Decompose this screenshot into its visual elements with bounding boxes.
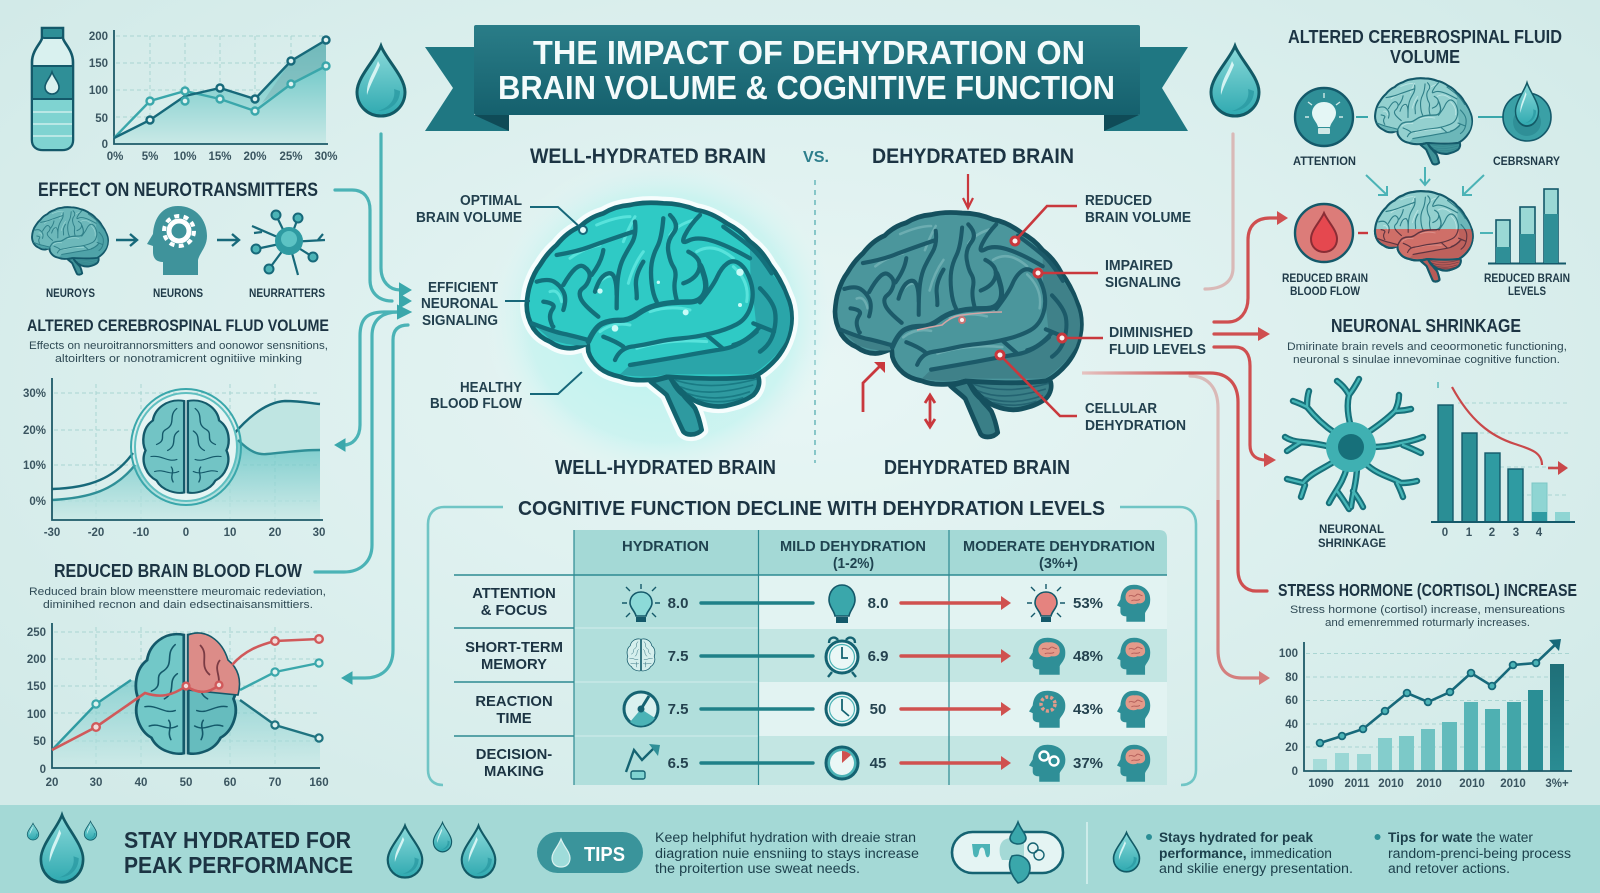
footer headline <box>124 827 353 878</box>
heading: altered cerebrospinal fluid volume <box>1288 27 1562 67</box>
table heading: COGNITIVE FUNCTION DECLINE WITH DEHYDRATION LEVELS <box>518 498 1105 520</box>
column headers: HYDRATION <box>622 538 709 555</box>
bullet: tips for water <box>1374 830 1571 876</box>
neurotransmitter icon flow: NEURRATTERS <box>249 286 325 300</box>
column headers: (1-2%) <box>833 555 874 572</box>
text block: shrinkage description: Dmirinate brain revels and ceoormonetic functioning, <box>1287 341 1567 353</box>
diagram: fluid and attention: BLOOD FLOW <box>1290 284 1361 298</box>
chart: blood flow lines with brain: 40 <box>135 777 147 789</box>
chart: shrinkage bars: 4 <box>1536 527 1543 539</box>
tips text <box>655 830 919 876</box>
labels: well-hydrated brain callouts: EFFICIENT <box>428 280 498 296</box>
labels: well-hydrated brain callouts: HEALTHY <box>460 380 522 396</box>
row labels <box>465 586 563 780</box>
panel: cognitive function table <box>428 498 1196 785</box>
chart: cerebrospinal fluid curve with brain: 0% <box>29 496 46 508</box>
row labels: DECISION- <box>476 747 552 763</box>
text block: cerebrospinal description: Effects on neuroitrannorsmitters and oonowor sensnitions, <box>29 340 328 352</box>
icon: drop circle <box>1503 83 1551 141</box>
icons: three drops <box>388 822 495 878</box>
chart: cortisol bars and line: 100 <box>1279 648 1298 660</box>
arrows: shrinkage indicators <box>863 174 973 427</box>
chart: cortisol bars and line: 80 <box>1285 672 1298 684</box>
diagram: fluid and attention <box>1282 78 1570 298</box>
icon: capsule <box>952 822 1063 883</box>
icon: footer drop <box>1114 833 1139 872</box>
row: attention and focus: 8.0 <box>868 595 888 612</box>
bullet: stays hydrated: performance, immedication <box>1159 846 1332 861</box>
chart: dehydration percentage line chart: 5% <box>142 151 158 163</box>
arrow <box>116 234 137 246</box>
caption: neuronal shrinkage: NEURONAL <box>1319 522 1384 536</box>
labels: dehydrated brain callouts: BRAIN VOLUME <box>1085 210 1191 226</box>
heading: effect on neurotransmitters: EFFECT ON NEUROTRANSMITTERS <box>38 179 318 201</box>
heading: altered cerebrospinal fluid volume: VOLUME <box>1390 47 1460 67</box>
banner tail right <box>1104 47 1188 131</box>
chart: blood flow lines with brain: 50 <box>180 777 192 789</box>
chart: blood flow lines with brain: 20 <box>46 777 58 789</box>
text block: stress description <box>1290 604 1566 629</box>
chart: dehydration percentage line chart: 25% <box>279 151 303 163</box>
labels: well-hydrated brain callouts: NEURONAL <box>421 296 498 312</box>
chart: cerebrospinal fluid curve with brain <box>23 378 325 539</box>
banner tail left <box>425 47 509 131</box>
tips pill <box>537 832 643 873</box>
arrow <box>217 234 239 246</box>
chart: cerebrospinal fluid curve with brain: 20 <box>269 527 281 539</box>
row: reaction time <box>624 691 1150 728</box>
tips pill: TIPS <box>584 844 625 866</box>
chart: cortisol bars and line: 2011 <box>1345 778 1370 790</box>
heading: dehydrated: DEHYDRATED BRAIN <box>872 145 1074 168</box>
row: attention and focus <box>622 584 1150 623</box>
illustration: neuron <box>1285 379 1423 509</box>
icon: neuron <box>252 210 325 275</box>
column headers: (3%+) <box>1039 555 1078 572</box>
tips text: the proitertion use sweat needs. <box>655 861 860 876</box>
row labels: REACTION <box>475 694 553 710</box>
row: reaction time: 43% <box>1073 701 1103 718</box>
column headers <box>622 538 1155 572</box>
heading: neuronal shrinkage: NEURONAL SHRINKAGE <box>1331 316 1521 336</box>
panel: footer <box>27 815 1571 884</box>
chart: blood flow lines with brain: 30 <box>90 777 102 789</box>
chart: cortisol bars and line: 2010 <box>1378 778 1404 790</box>
table frame <box>428 507 1196 785</box>
chart: dehydration percentage line chart: 150 <box>89 58 108 70</box>
footer band background <box>0 805 1600 893</box>
icon: blood drop circle <box>1295 204 1353 262</box>
labels: dehydrated brain callouts: IMPAIRED <box>1105 258 1173 274</box>
row: short-term memory: 6.9 <box>868 648 888 665</box>
row labels: TIME <box>496 711 532 727</box>
tips text: Keep helphifut hydration with dreaie stran <box>655 830 916 845</box>
bullet: stays hydrated <box>1146 830 1353 876</box>
row labels: MEMORY <box>481 657 547 673</box>
labels: dehydrated brain callouts: DIMINISHED <box>1109 325 1193 341</box>
icon: partly red brain <box>1375 191 1473 281</box>
chart: cortisol bars and line: 1090 <box>1308 778 1334 790</box>
labels: dehydrated brain callouts: REDUCED <box>1085 193 1152 209</box>
row: decision-making <box>626 744 1150 782</box>
chart: cortisol bars and line: 0 <box>1292 766 1298 778</box>
labels: dehydrated brain callouts: FLUID LEVELS <box>1109 342 1206 358</box>
chart: blood flow lines with brain: 70 <box>269 777 281 789</box>
title text: BRAIN VOLUME & COGNITIVE FUNCTION <box>498 69 1115 106</box>
chart: dehydration percentage line chart: 200 <box>89 31 108 43</box>
chart: blood flow lines with brain: 50 <box>33 736 46 748</box>
bullet: stays hydrated: and skilie energy presentation. <box>1159 861 1353 876</box>
row: short-term memory: 48% <box>1073 648 1103 665</box>
row: decision-making: 6.5 <box>668 755 688 772</box>
icon: water bottle <box>32 28 73 150</box>
chart: blood flow lines with brain: 200 <box>27 654 46 666</box>
chart: blood flow lines with brain: 60 <box>224 777 236 789</box>
labels: dehydrated brain callouts: CELLULAR <box>1085 401 1157 417</box>
row: attention and focus: 8.0 <box>668 595 688 612</box>
chart: cerebrospinal fluid curve with brain: -30 <box>44 527 60 539</box>
diagram: fluid and attention: CEBRSNARY <box>1493 154 1560 168</box>
panel: left column <box>23 28 338 789</box>
row: reaction time: 50 <box>870 701 886 718</box>
row labels: ATTENTION <box>472 586 556 602</box>
chart: cortisol bars and line: 20 <box>1285 742 1298 754</box>
bullet: tips for water: Tips for wate the water <box>1388 830 1534 845</box>
diagram: fluid and attention: LEVELS <box>1508 284 1546 298</box>
column headers: MODERATE DEHYDRATION <box>963 538 1155 555</box>
chart: dehydration percentage line chart: 15% <box>208 151 232 163</box>
text block: shrinkage description <box>1287 341 1567 366</box>
chart: cortisol bars and line: 2010 <box>1500 778 1526 790</box>
labels: well-hydrated brain callouts <box>416 193 587 412</box>
chart: shrinkage bars: 0 <box>1442 527 1448 539</box>
chart: blood flow lines with brain: 250 <box>27 627 46 639</box>
heading: well-hydrated: WELL-HYDRATED BRAIN <box>530 145 766 168</box>
chart: blood flow lines with brain: 160 <box>309 777 329 789</box>
labels: well-hydrated brain callouts: BLOOD FLOW <box>430 396 522 412</box>
chart: blood flow lines with brain: 0 <box>40 764 46 776</box>
chart: cerebrospinal fluid curve with brain: -10 <box>133 527 149 539</box>
bullet: tips for water: random-prenci-being process <box>1388 846 1571 861</box>
row: short-term memory: 7.5 <box>668 648 688 665</box>
chart: cortisol bars and line: 40 <box>1285 719 1298 731</box>
labels: dehydrated brain callouts: DEHYDRATION <box>1085 418 1186 434</box>
labels: well-hydrated brain callouts: SIGNALING <box>422 313 498 329</box>
row: decision-making: 45 <box>870 755 886 772</box>
diagram: fluid and attention: REDUCED BRAIN <box>1282 271 1368 285</box>
heading: reduced brain blood flow: REDUCED BRAIN BLOOD FLOW <box>54 561 302 581</box>
row: short-term memory <box>627 638 1150 677</box>
caption: well-hydrated: WELL-HYDRATED BRAIN <box>555 457 776 479</box>
chart: dehydration percentage line chart: 10% <box>173 151 197 163</box>
row: decision-making: 37% <box>1073 755 1103 772</box>
labels: dehydrated brain callouts <box>917 193 1206 434</box>
text block: blood flow description: diminihed recnon and dain edsectinaisansmittiers. <box>43 599 313 611</box>
text block: stress description: Stress hormone (cortisol) increase, mensureations <box>1290 604 1566 616</box>
icons: drops left <box>27 815 97 882</box>
text block: stress description: and emenremmed roturmarly increases. <box>1325 617 1530 629</box>
chart: cortisol bars and line: 2010 <box>1459 778 1485 790</box>
chart: dehydration percentage line chart: 30% <box>314 151 338 163</box>
chart: cerebrospinal fluid curve with brain: 0 <box>183 527 189 539</box>
chart: dehydration percentage line chart: 0% <box>107 151 123 163</box>
text block: blood flow description <box>29 586 326 611</box>
row labels: & FOCUS <box>481 603 547 619</box>
bullet: tips for water: and retover actions. <box>1388 861 1510 876</box>
caption: neuronal shrinkage <box>1318 522 1386 550</box>
neurotransmitter icon flow: NEURONS <box>153 286 203 300</box>
caption: neuronal shrinkage: SHRINKAGE <box>1318 536 1386 550</box>
title banner <box>425 25 1188 131</box>
chart: cerebrospinal fluid curve with brain: -20 <box>88 527 104 539</box>
icon: head with gear <box>147 206 207 275</box>
label: versus: VS. <box>803 149 829 166</box>
labels: dehydrated brain callouts: SIGNALING <box>1105 275 1181 291</box>
neurotransmitter icon flow <box>32 206 325 300</box>
column headers: MILD DEHYDRATION <box>780 538 926 555</box>
chart: blood flow lines with brain <box>27 623 329 789</box>
chart: cortisol bars and line: 3%+ <box>1545 778 1569 790</box>
chart: dehydration percentage line chart: 0 <box>102 139 108 151</box>
row labels: MAKING <box>484 764 544 780</box>
illustration: dehydrated brain <box>835 212 1081 437</box>
labels: well-hydrated brain callouts: OPTIMAL <box>460 193 522 209</box>
chart: cortisol bars and line: 2010 <box>1416 778 1442 790</box>
chart: cortisol bars and line <box>1279 639 1572 790</box>
chart: shrinkage bars: 1 <box>1466 527 1473 539</box>
brain glow <box>484 153 840 483</box>
chart: cerebrospinal fluid curve with brain: 20% <box>23 425 46 437</box>
icon: brain <box>32 207 108 275</box>
heading: altered cerebrospinal fluid volume: ALTERED CEREBROSPINAL FLUID <box>1288 27 1562 47</box>
chart: blood flow lines with brain: 150 <box>27 681 46 693</box>
chart: cerebrospinal fluid curve with brain: 10 <box>224 527 236 539</box>
footer headline: STAY HYDRATED FOR <box>124 827 351 853</box>
footer headline: PEAK PERFORMANCE <box>124 852 353 878</box>
diagram: fluid and attention: REDUCED BRAIN <box>1484 271 1570 285</box>
row: reaction time: 7.5 <box>668 701 688 718</box>
icon: left water drop <box>357 46 405 116</box>
chart: blood flow lines with brain: 100 <box>27 709 46 721</box>
text block: blood flow description: Reduced brain blow meensttere meuromaic redeviation, <box>29 586 326 598</box>
chart: dehydration percentage line chart: 100 <box>89 85 108 97</box>
text block: cerebrospinal description <box>29 340 328 365</box>
illustration: well-hydrated brain <box>527 203 792 434</box>
chart: shrinkage bars: 2 <box>1489 527 1495 539</box>
caption: dehydrated: DEHYDRATED BRAIN <box>884 457 1070 479</box>
icon: right water drop <box>1211 46 1259 116</box>
text block: shrinkage description: neuronal s sinulae innevominae cognitive function. <box>1293 354 1560 366</box>
chart: cerebrospinal fluid curve with brain: 30% <box>23 388 46 400</box>
tips text: diagration nuie ensniing to stays increase <box>655 846 919 861</box>
icon: bulb circle <box>1295 88 1353 146</box>
chart: dehydration percentage line chart: 50 <box>95 113 108 125</box>
title text <box>498 34 1115 106</box>
chart: dehydration percentage line chart: 20% <box>243 151 267 163</box>
arrows: right connectors <box>1082 134 1288 685</box>
chart: cerebrospinal fluid curve with brain: 30 <box>313 527 325 539</box>
chart: dehydration percentage line chart <box>89 30 338 163</box>
panel: brain comparison <box>416 145 1206 483</box>
arrows: left connectors into centre <box>315 134 410 684</box>
chart: cortisol bars and line: 60 <box>1285 695 1298 707</box>
bullet: stays hydrated: Stays hydrated for peak <box>1159 830 1313 845</box>
labels: well-hydrated brain callouts: BRAIN VOLUME <box>416 210 522 226</box>
arrows to lower brain <box>1366 167 1484 195</box>
row: attention and focus: 53% <box>1073 595 1103 612</box>
chart: cerebrospinal fluid curve with brain: 10% <box>23 460 46 472</box>
title text: THE IMPACT OF DEHYDRATION ON <box>533 34 1085 71</box>
chart: shrinkage bars <box>1431 382 1575 539</box>
icon: small bars <box>1488 189 1566 264</box>
chart: shrinkage bars: 3 <box>1513 527 1519 539</box>
icon: brain top <box>1375 78 1472 164</box>
table body <box>454 530 1167 785</box>
heading: altered cerebrospinal fluid volume: ALTERED CEREBROSPINAL FLUD VOLUME <box>27 316 329 335</box>
diagram: fluid and attention: ATTENTION <box>1293 154 1356 168</box>
text block: cerebrospinal description: altoirlters or nonotramicrent ognitiive minking <box>55 353 302 365</box>
panel: right column <box>1278 27 1577 790</box>
row labels: SHORT-TERM <box>465 640 563 656</box>
neurotransmitter icon flow: NEUROYS <box>46 286 95 300</box>
